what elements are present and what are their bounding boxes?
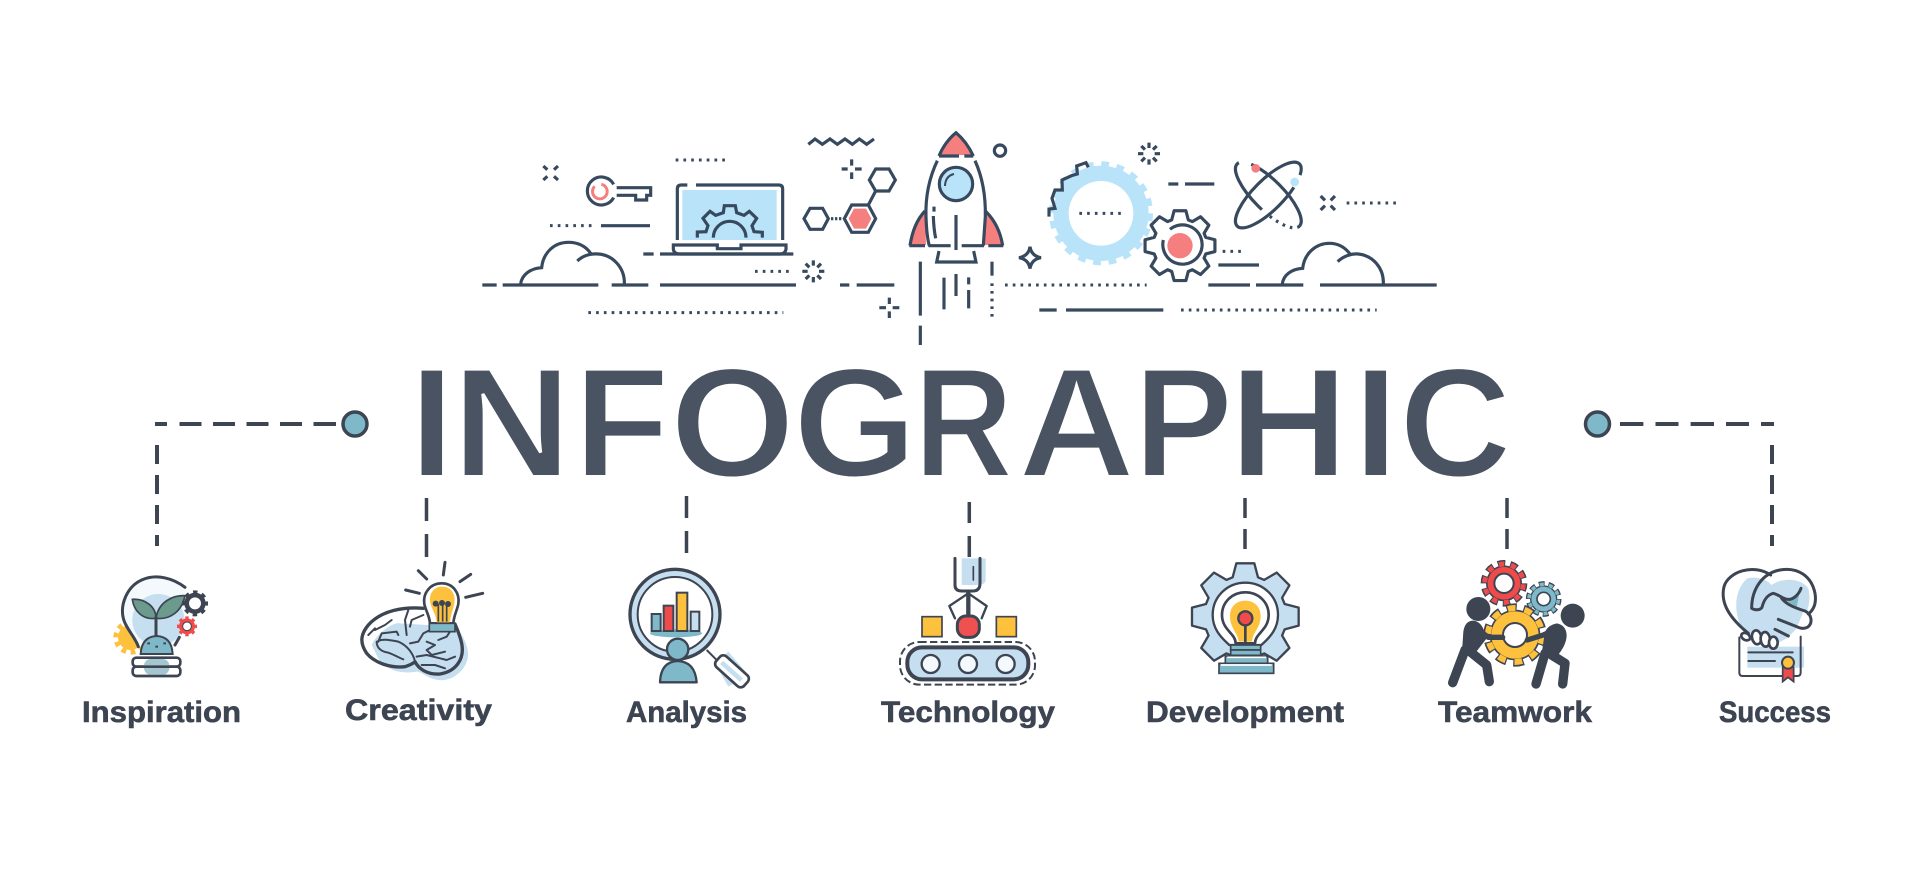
handshake xyxy=(1740,569,1815,649)
title: R xyxy=(914,336,1013,510)
sparkle plus upper xyxy=(842,159,862,179)
title: F xyxy=(574,336,669,510)
lower dash and dotted line xyxy=(1039,305,1377,315)
short lines right of gear xyxy=(1218,251,1259,265)
heart outline xyxy=(1723,570,1771,633)
icons and labels: inspiration and creativity xyxy=(116,562,483,680)
icon: molecule hexagons xyxy=(804,169,895,232)
title: C xyxy=(1399,336,1512,510)
red gear xyxy=(1484,563,1524,603)
bar chart xyxy=(652,593,699,631)
sparkle cross xyxy=(543,166,558,180)
red gear xyxy=(179,618,195,635)
connector: left dashed with node xyxy=(157,412,367,546)
star sparkle xyxy=(1019,247,1041,269)
person xyxy=(667,639,688,660)
icon: large blue gear xyxy=(1049,163,1150,262)
teal gear xyxy=(1528,584,1559,614)
icon: laptop with gear xyxy=(643,185,793,254)
dash line near gear xyxy=(1168,179,1214,189)
left person xyxy=(1453,597,1503,683)
horizon line left xyxy=(482,280,894,290)
dark gear xyxy=(184,592,206,614)
icon: key xyxy=(587,177,651,205)
icon: technology conveyor xyxy=(900,558,1035,685)
stepped base xyxy=(1219,645,1274,673)
dotted line below rocket xyxy=(1005,280,1147,289)
label: Creativity: Creativity xyxy=(345,694,492,727)
icon: success heart handshake and certificate xyxy=(1723,569,1815,682)
certificate xyxy=(1739,637,1801,682)
dotted line above laptop xyxy=(676,155,726,164)
icon: atom xyxy=(1227,153,1310,237)
icon: creativity brain with bulb xyxy=(362,562,483,680)
dotted line and burst xyxy=(755,260,824,282)
dome xyxy=(141,636,173,654)
sparkle and dotted line right xyxy=(1321,196,1397,210)
label: Teamwork: Teamwork xyxy=(1438,696,1592,729)
top illustration: left half xyxy=(482,133,1003,345)
icon: left cloud xyxy=(521,242,624,284)
label: Inspiration: Inspiration xyxy=(82,696,241,729)
title: O xyxy=(670,336,795,510)
icon: analysis magnifier xyxy=(630,569,751,689)
icon: development gear with bulb xyxy=(1192,563,1299,673)
icon: right cloud xyxy=(1282,243,1383,284)
label: Success: Success xyxy=(1719,696,1831,729)
leaves xyxy=(132,599,156,619)
connectors: vertical dashes to icons xyxy=(426,496,1507,557)
label: Technology: Technology xyxy=(881,696,1055,729)
icon: teamwork people and gears xyxy=(1453,563,1585,684)
title: I xyxy=(409,336,455,510)
sparkle plus lower xyxy=(879,298,899,318)
title: I xyxy=(1353,336,1399,510)
title: A xyxy=(1018,336,1135,510)
top illustration: right half xyxy=(994,143,1437,310)
dotted line lower left xyxy=(588,308,783,317)
label: Development: Development xyxy=(1146,696,1344,729)
title: N xyxy=(452,336,572,510)
zigzag xyxy=(808,139,874,144)
yellow gear xyxy=(1487,607,1543,663)
title: G xyxy=(793,336,917,510)
right person xyxy=(1527,604,1585,684)
title: P xyxy=(1134,336,1233,510)
icon: small outlined gear with pink core xyxy=(1145,211,1215,281)
small ring xyxy=(994,145,1006,156)
base xyxy=(133,658,180,667)
icon: inspiration bulb xyxy=(116,577,206,676)
yellow gear xyxy=(116,623,145,652)
icon: rocket xyxy=(909,133,1003,345)
horizon line right xyxy=(1208,280,1437,290)
connector: right dashed with node xyxy=(1586,412,1772,546)
title: H xyxy=(1229,336,1348,510)
icons: analysis and technology xyxy=(630,558,1035,689)
dotted and solid line beside key xyxy=(550,221,650,230)
label: Analysis: Analysis xyxy=(626,696,747,729)
burst xyxy=(1138,143,1160,165)
